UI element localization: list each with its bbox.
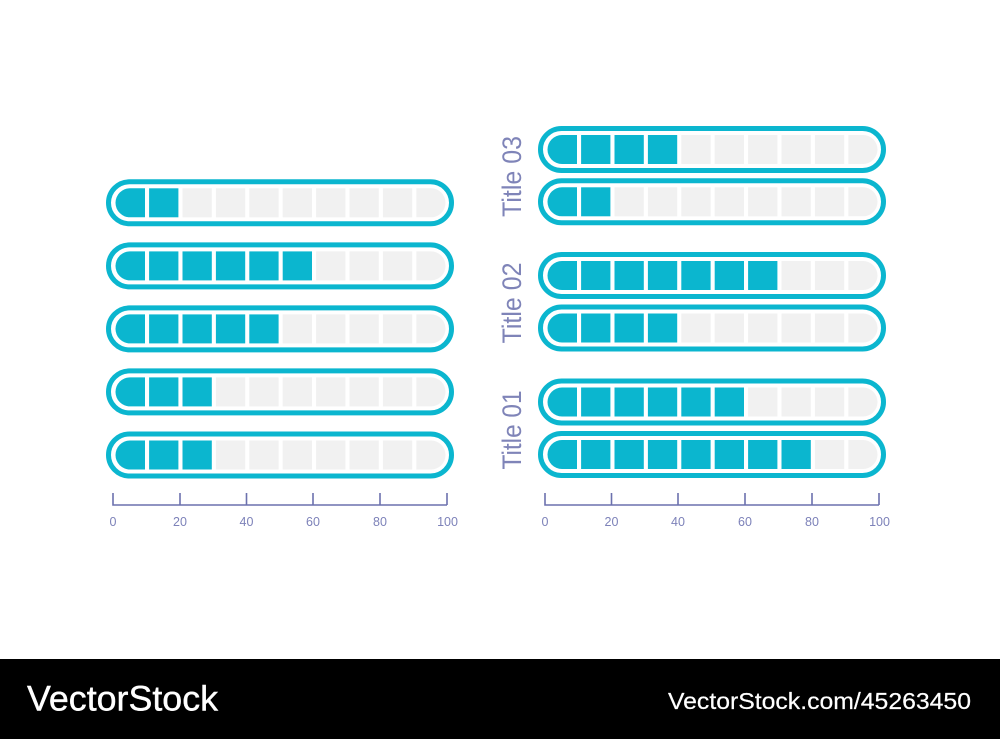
bar: left row 3, value 50 bbox=[108, 308, 452, 350]
axis: right scale: 40 bbox=[671, 515, 685, 529]
axis: right scale: 100 bbox=[869, 515, 890, 529]
axis: left scale bbox=[110, 493, 458, 529]
bar: left row 4, value 30 bbox=[108, 371, 452, 413]
axis: left scale: 80 bbox=[373, 515, 387, 529]
bar: Title 03 row 2, value 20 bbox=[540, 181, 884, 223]
heading: Title 01: Title 01 bbox=[497, 390, 527, 470]
footer logo text: VectorStock bbox=[27, 680, 219, 718]
panel: left chart bbox=[108, 182, 458, 529]
bar: Title 03 row 1, value 40 bbox=[540, 128, 884, 170]
bar: left row 5, value 30 bbox=[108, 434, 452, 476]
axis: left scale: 0 bbox=[110, 515, 117, 529]
bar: Title 02 row 1, value 70 bbox=[540, 254, 884, 296]
bar: left row 1, value 20 bbox=[108, 182, 452, 224]
bar: Title 01 row 2, value 80 bbox=[540, 434, 884, 476]
axis: left scale: 60 bbox=[306, 515, 320, 529]
axis: left scale: 40 bbox=[240, 515, 253, 529]
axis: right scale bbox=[542, 493, 890, 529]
axis: right scale: 60 bbox=[738, 515, 752, 529]
axis: right scale: 80 bbox=[805, 515, 819, 529]
axis: left scale: 20 bbox=[173, 515, 187, 529]
axis: right scale: 0 bbox=[542, 515, 549, 529]
footer image id: VectorStock.com/45263450 bbox=[668, 688, 971, 714]
bar: Title 02 row 2, value 40 bbox=[540, 307, 884, 349]
bar: Title 01 row 1, value 60 bbox=[540, 381, 884, 423]
axis: left scale: 100 bbox=[437, 515, 458, 529]
heading: Title 03: Title 03 bbox=[497, 136, 527, 217]
heading: Title 02: Title 02 bbox=[497, 262, 527, 344]
axis: right scale: 20 bbox=[605, 515, 618, 529]
bar: left row 2, value 60 bbox=[108, 245, 452, 287]
footer band bbox=[0, 659, 1000, 739]
panel: right chart bbox=[497, 128, 890, 529]
